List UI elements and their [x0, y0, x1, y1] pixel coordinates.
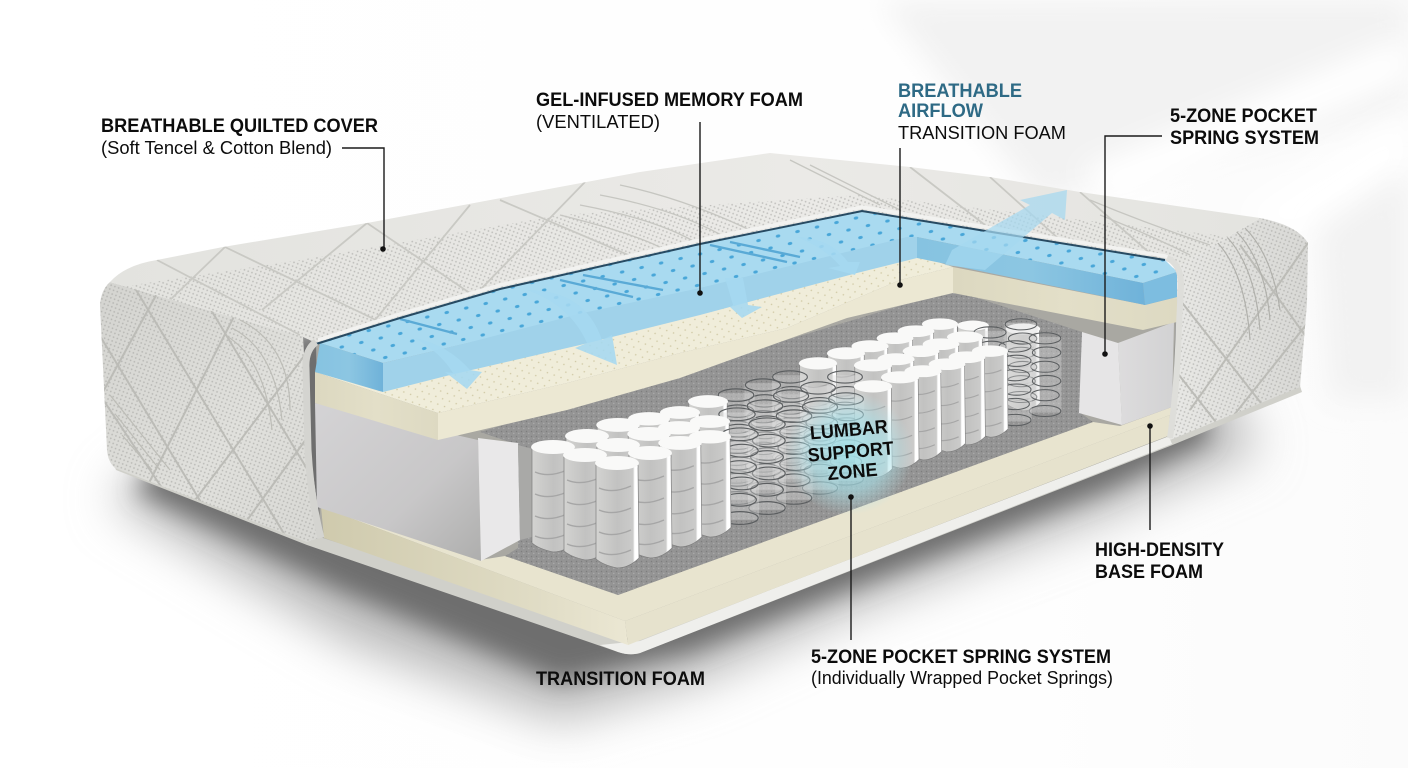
front row of springs [595, 333, 1062, 568]
leader: transition foam top [897, 148, 903, 288]
gel-infused memory foam layer [315, 212, 1177, 392]
label: pocket springs bottom: (Individually Wrapped Pocket Springs) [811, 667, 1113, 688]
label: quilted cover [101, 116, 378, 158]
label: lumbar support zone: ZONE [827, 460, 878, 485]
lumbar zone glow [785, 391, 913, 515]
transition foam layer [315, 255, 1177, 440]
grey felt spring base [480, 290, 1093, 595]
cut-out interior [316, 210, 1177, 640]
label: gel memory foam [536, 90, 803, 132]
label: base foam: BASE FOAM [1095, 562, 1203, 583]
leader: quilted cover [342, 148, 386, 252]
cover side panel, right [1170, 218, 1308, 440]
cover cut edge seams [306, 207, 1181, 538]
leader: side foam [1102, 136, 1162, 357]
label: breathable airflow: TRANSITION FOAM [898, 122, 1066, 143]
bottom edge strip of the cover [113, 386, 1302, 654]
label: pocket springs bottom: 5-ZONE POCKET SPRING SYSTEM [811, 647, 1111, 668]
label: pocket springs bottom [811, 647, 1113, 688]
label: breathable airflow [898, 81, 1066, 143]
mattress cover [60, 153, 1330, 654]
floor shadow under mattress [110, 300, 1260, 722]
leader: spring system [848, 494, 854, 640]
label: 5-zone system top right: 5-ZONE POCKET [1170, 106, 1317, 127]
label: lumbar support zone: LUMBAR [809, 417, 889, 444]
middle row of springs [563, 319, 1038, 560]
label: breathable airflow: AIRFLOW [898, 101, 983, 122]
arrow: rising airflow [945, 190, 1067, 270]
label: base foam: HIGH-DENSITY [1095, 540, 1224, 561]
arrow: airflow 3 [725, 278, 762, 318]
cover side panel, left [100, 282, 318, 542]
pocket spring rows [531, 318, 1062, 568]
airflow arrows [415, 190, 1067, 389]
label: breathable airflow: BREATHABLE [898, 81, 1022, 102]
white strip below base foam [600, 434, 1172, 654]
leader lines and dots [342, 122, 1162, 640]
ventilation slots [400, 242, 800, 334]
label: transition foam bottom: TRANSITION FOAM [536, 669, 705, 690]
arrow: airflow 1 [415, 338, 482, 389]
right side foam block [1079, 322, 1174, 425]
high-density base foam layer [321, 407, 1172, 645]
label: lumbar support zone: SUPPORT [807, 438, 895, 467]
leader: gel foam [697, 122, 703, 296]
label: quilted cover: (Soft Tencel & Cotton Blend) [101, 137, 332, 158]
label: 5-zone system top right: SPRING SYSTEM [1170, 128, 1319, 149]
label: quilted cover: BREATHABLE QUILTED COVER [101, 116, 378, 137]
label: lumbar support zone [805, 416, 897, 487]
left side foam block [315, 403, 536, 561]
leader: base foam [1147, 423, 1153, 530]
back row of springs [531, 318, 1040, 552]
label: base foam [1095, 540, 1224, 583]
label: gel memory foam: (VENTILATED) [536, 111, 660, 132]
arrow: airflow 2 [527, 290, 617, 365]
cover top surface [100, 153, 1260, 343]
label: 5-zone system top right [1170, 106, 1319, 149]
label: gel memory foam: GEL-INFUSED MEMORY FOAM [536, 90, 803, 111]
arrow: airflow 4 [797, 237, 860, 275]
